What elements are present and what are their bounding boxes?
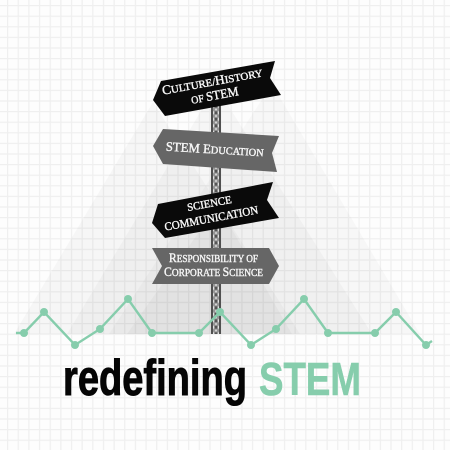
sign: STEM Education xyxy=(153,129,279,172)
sign: Responsibility of Corporate Science: CORPORATE SCIENCE xyxy=(164,265,263,279)
sign: Culture/History of STEM: CULTURE/HISTORY xyxy=(161,64,264,98)
signpost pole xyxy=(211,105,221,334)
title: STEM xyxy=(259,353,361,405)
sign: science communication: COMMUNICATION xyxy=(164,204,260,234)
sign: STEM Education: STEM EDUCATION xyxy=(165,139,265,159)
sign: Culture/History of STEM xyxy=(153,61,281,116)
background triangles xyxy=(14,84,420,334)
title: redefining xyxy=(63,350,247,406)
sign: Responsibility of Corporate Science: RESPONSIBILITY OF xyxy=(169,251,258,265)
sign: Culture/History of STEM: OF STEM xyxy=(190,83,240,107)
sign: Responsibility of Corporate Science xyxy=(152,248,279,284)
line chart xyxy=(16,295,432,349)
sign: science communication: SCIENCE xyxy=(186,194,233,214)
sign: science communication xyxy=(152,182,279,238)
